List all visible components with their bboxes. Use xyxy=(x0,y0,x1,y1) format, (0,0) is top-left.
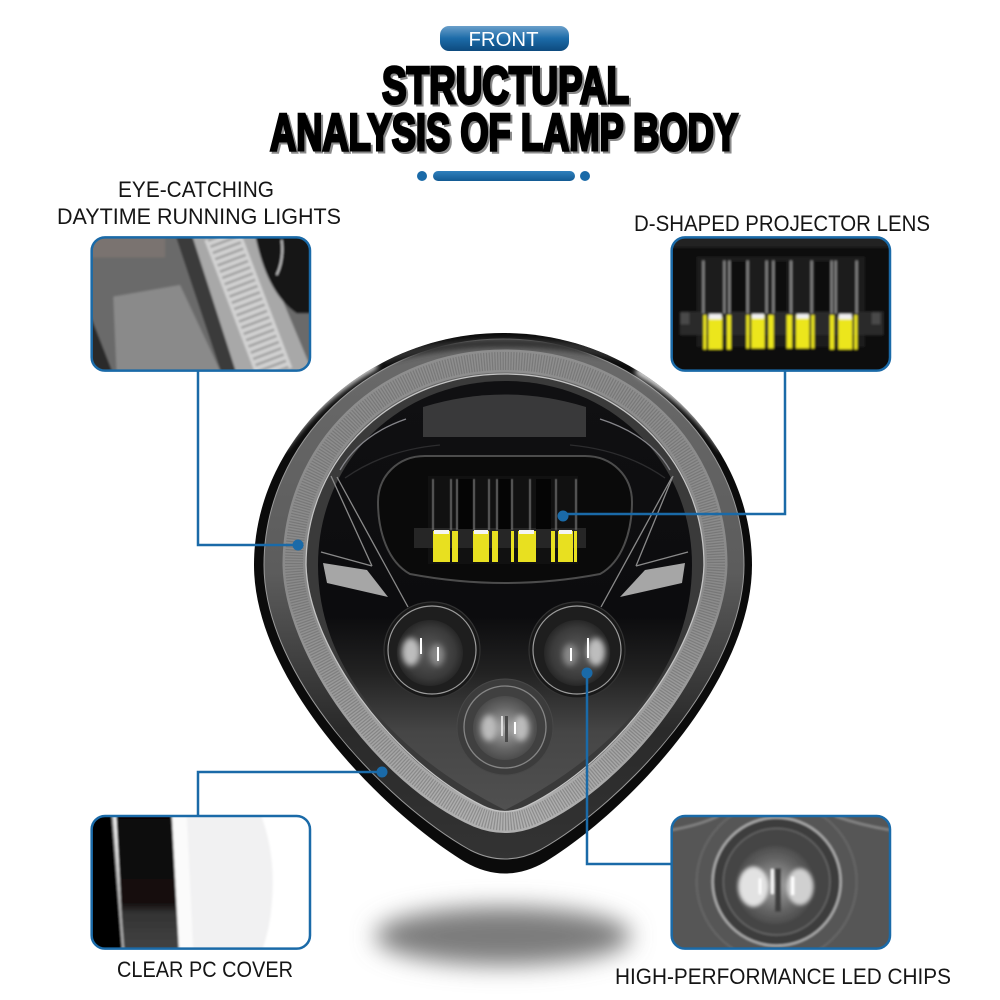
inset: LED chips xyxy=(670,814,892,950)
label: daytime running lights: EYE-CATCHING xyxy=(118,177,274,202)
side light right xyxy=(620,563,685,597)
lamp inner face xyxy=(318,381,692,810)
label: clear PC cover: CLEAR PC COVER xyxy=(117,957,293,982)
inset: daytime running lights xyxy=(88,234,313,374)
projector pod xyxy=(378,456,632,583)
upper arcs xyxy=(340,419,670,478)
right lens xyxy=(529,602,625,698)
ground shadow xyxy=(375,907,631,965)
glare highlights xyxy=(283,343,722,445)
label: LED chips: HIGH-PERFORMANCE LED CHIPS xyxy=(615,964,951,989)
right V strut xyxy=(601,476,688,607)
title: STRUCTUPAL xyxy=(382,57,629,115)
left lens xyxy=(384,602,480,698)
inset: projector lens xyxy=(668,234,893,374)
connector: projector lens xyxy=(558,371,785,522)
daytime running light band xyxy=(294,361,716,822)
badge: FRONT xyxy=(440,26,569,51)
clear lens rim xyxy=(264,339,744,859)
lamp outer housing xyxy=(254,333,752,874)
LED chips xyxy=(433,531,577,562)
label: projector lens: D-SHAPED PROJECTOR LENS xyxy=(634,211,930,236)
connector: LED chips xyxy=(582,668,672,864)
upper display window xyxy=(423,394,586,437)
title divider xyxy=(417,171,590,181)
bottom lens xyxy=(457,679,553,775)
badge: FRONT: FRONT xyxy=(468,29,538,51)
label: daytime running lights xyxy=(57,177,341,229)
headlight lamp xyxy=(254,333,752,874)
inset: clear PC cover xyxy=(88,813,313,952)
title: ANALYSIS OF LAMP BODY xyxy=(270,104,738,162)
connector: daytime running lights xyxy=(198,371,304,550)
projector module xyxy=(414,476,586,564)
title xyxy=(270,57,738,162)
side light left xyxy=(323,563,388,597)
left V strut xyxy=(321,476,408,607)
connector: clear PC cover xyxy=(198,766,388,816)
label: daytime running lights: DAYTIME RUNNING LIGHTS xyxy=(57,204,341,229)
